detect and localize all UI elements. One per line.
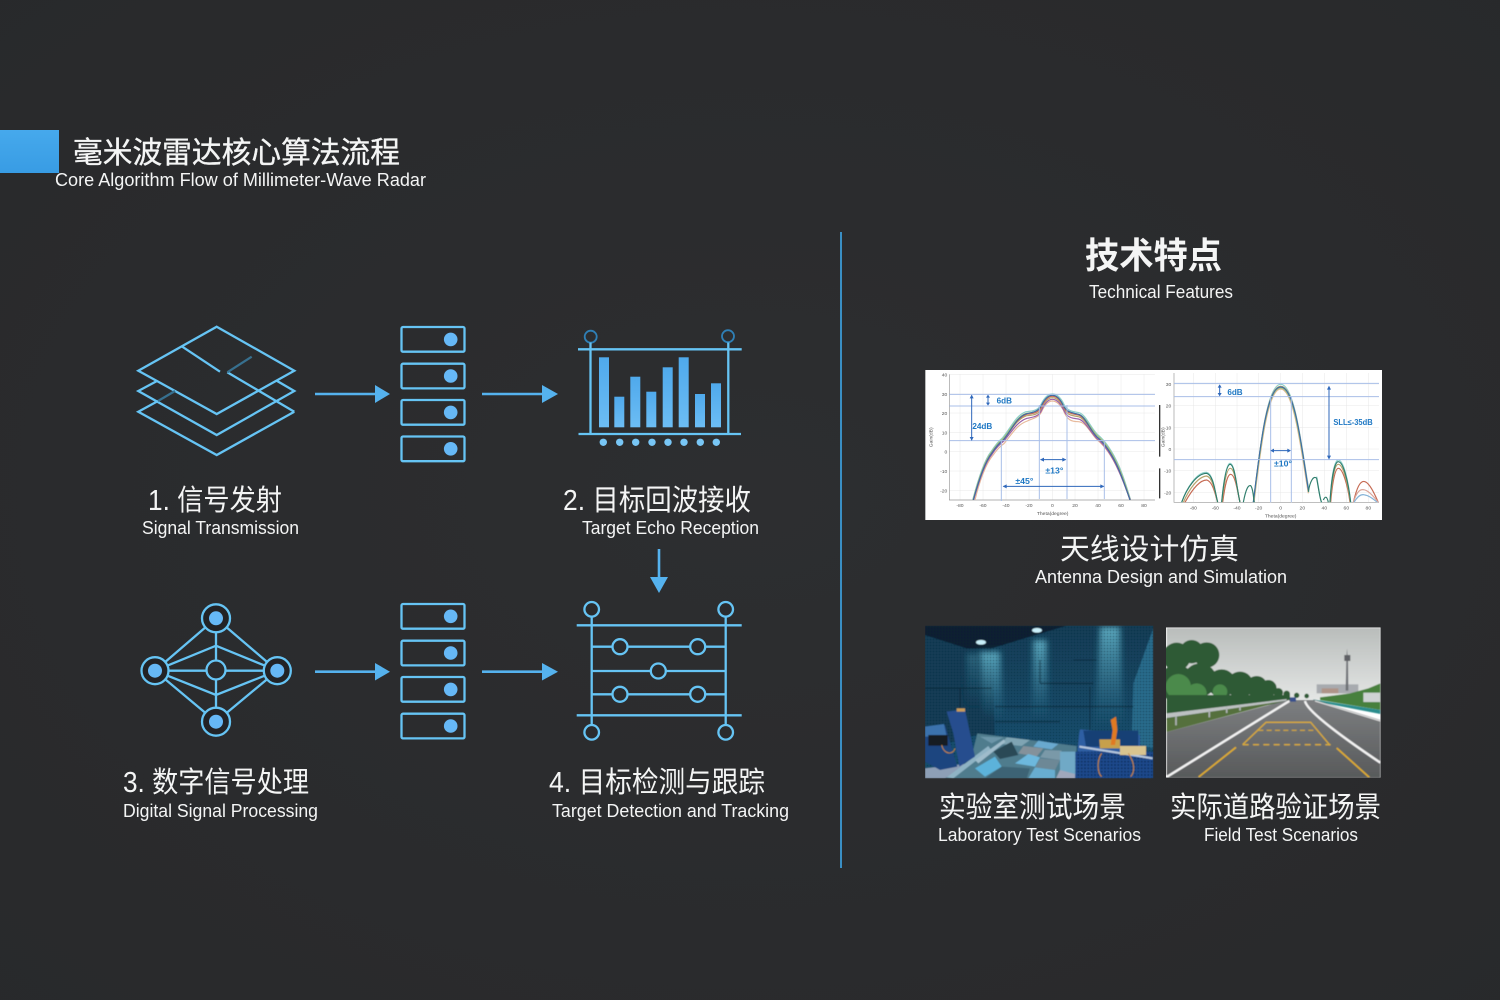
chart: left gain pattern: 24dB [972,422,993,431]
step 1 label: 1. 信号发射 [148,484,282,517]
step 4 label: 4. 目标检测与跟踪 [549,766,765,799]
vertical divider [840,232,842,868]
field caption: Field Test Scenarios [1204,825,1358,845]
chart: left gain pattern: 6dB [997,396,1012,405]
arrow: step 2 down to step 4 [650,549,668,593]
chart: left gain pattern: Gain(dB) [929,427,935,447]
chart: left gain pattern: 40 [1095,503,1101,509]
step 3 label: 3. 数字信号处理 [123,766,309,799]
chart: left gain pattern: 0 [945,450,948,456]
lab caption: Laboratory Test Scenarios [938,825,1141,845]
field caption [1170,791,1381,845]
chart: right gain pattern: -40 [1233,506,1241,512]
step 1 label [142,484,299,538]
step 4 label: Target Detection and Tracking [552,801,789,821]
chart: right gain pattern: Theta(degree) [1265,514,1297,520]
step 1 label: Signal Transmission [142,518,299,538]
chart: left gain pattern: 60 [1118,503,1124,509]
chart: right gain pattern: -60 [1212,506,1219,512]
chart: left gain pattern: -10 [940,469,948,475]
icon: signal processing network [142,604,291,736]
icon: server stack upper [402,327,464,461]
icon: detection and tracking grid [577,602,742,740]
chart: right gain pattern: 10 [1166,425,1172,431]
features heading: Technical Features [1089,282,1233,302]
chart: left gain pattern: Theta(degree) [1037,511,1069,517]
step 2 label [563,484,759,538]
chart: left gain pattern: -80 [956,503,964,509]
icon: echo bar chart [578,330,742,446]
antenna caption: 天线设计仿真 [1060,533,1239,566]
chart: right gain pattern: ±10° [1274,460,1292,469]
icon: signal transmission layers [138,327,294,455]
arrow: stack to step 4 [482,663,558,680]
features heading: 技术特点 [1085,235,1222,276]
icon: server stack lower [402,604,464,738]
lab caption: 实验室测试场景 [939,791,1126,824]
chart: right gain pattern: 30 [1166,382,1172,388]
header [0,130,426,190]
chart: right gain pattern: 60 [1344,506,1349,512]
arrow: step 3 to stack [315,663,390,680]
chart: left gain pattern: 30 [942,392,948,398]
chart: right gain pattern: 6dB [1227,388,1243,397]
lab caption [938,791,1141,845]
photo: anechoic chamber lab [925,626,1153,778]
features heading [1085,235,1233,302]
chart: left gain pattern: -20 [940,489,948,495]
photo: field road [1158,627,1381,778]
step 2 label: 2. 目标回波接收 [563,484,751,517]
chart: right gain pattern: SLL≤-35dB [1333,418,1373,427]
antenna caption [1035,533,1287,587]
chart: right gain pattern: Gain(dB) [1161,427,1167,447]
main subtitle: Core Algorithm Flow of Millimeter-Wave Radar [55,170,426,190]
chart: right gain pattern [1161,373,1379,520]
main title: 毫米波雷达核心算法流程 [73,137,400,170]
chart: left gain pattern: 10 [942,430,948,436]
step 4 label [549,766,789,821]
antenna caption: Antenna Design and Simulation [1035,567,1287,587]
chart: right gain pattern: 40 [1322,506,1327,512]
chart: right gain pattern: 0 [1279,506,1282,512]
infographic canvas [0,130,1382,868]
chart: right gain pattern: 0 [1169,447,1172,453]
chart: left gain pattern: -20 [1025,503,1033,509]
chart: left gain pattern: 20 [1072,503,1078,509]
chart: right gain pattern: -10 [1164,469,1172,475]
chart: right gain pattern: 20 [1300,506,1305,512]
chart: right gain pattern: 80 [1366,506,1371,512]
chart: left gain pattern: -40 [1002,503,1010,509]
chart: right gain pattern: -20 [1164,491,1172,497]
arrow: stack to step 2 [482,385,558,403]
chart: left gain pattern: 0 [1051,503,1054,509]
chart: left gain pattern: ±45° [1015,477,1033,486]
panel: algorithm flow [123,327,789,821]
chart: right gain pattern: -80 [1190,506,1197,512]
chart: right gain pattern: -20 [1255,506,1262,512]
arrow: step 1 to stack [315,385,390,403]
step 3 label [123,766,318,821]
chart: left gain pattern: 20 [942,411,948,417]
chart: left gain pattern: 40 [942,372,948,378]
chart: left gain pattern [929,372,1155,517]
chart: left gain pattern: ±13° [1045,467,1063,476]
chart: left gain pattern: 80 [1141,503,1147,509]
field caption: 实际道路验证场景 [1170,791,1381,824]
step 2 label: Target Echo Reception [582,518,759,538]
step 3 label: Digital Signal Processing [123,801,318,821]
panel: technical features [925,235,1382,845]
header accent block [0,130,59,173]
chart: antenna gain patterns [925,370,1382,520]
chart: left gain pattern: -60 [979,503,987,509]
chart: right gain pattern: 20 [1166,404,1172,410]
